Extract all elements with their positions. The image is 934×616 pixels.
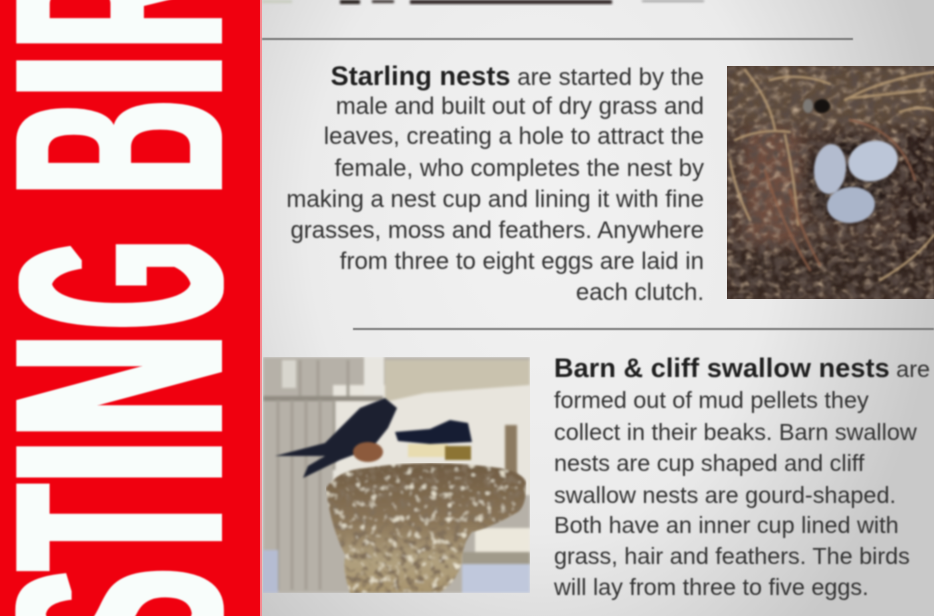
icon: three eggs [812, 135, 902, 225]
icon: swallows [275, 398, 472, 478]
photo: swallows on mud nest [263, 357, 530, 593]
text block: starling nests: female, who completes the nest by [334, 155, 704, 182]
text block: starling nests [286, 61, 705, 306]
text block: barn and cliff swallow nests: Barn & cliff swallow nests are [554, 353, 930, 383]
title: vertical lettering [0, 0, 286, 616]
text block: barn and cliff swallow nests: collect in their beaks. Barn swallow [554, 419, 917, 445]
panel: red title band [0, 0, 262, 616]
text block: starling nests: Starling nests are started by the [331, 61, 704, 91]
text block: barn and cliff swallow nests [553, 353, 930, 601]
text block: barn and cliff swallow nests: swallow nests are gourd-shaped. [554, 482, 896, 508]
text block: starling nests: leaves, creating a hole to attract the [324, 123, 704, 150]
text block: barn and cliff swallow nests: Both have an inner cup lined with [554, 512, 899, 538]
text block: starling nests: making a nest cup and lining it with fine [286, 186, 704, 213]
photo: starling nest with eggs [727, 66, 934, 299]
text block: starling nests: from three to eight eggs are laid in [340, 248, 704, 275]
text block: barn and cliff swallow nests: formed out of mud pellets they [554, 387, 869, 413]
divider: top rule [262, 38, 853, 40]
text block: starling nests: male and built out of dry grass and [336, 93, 704, 120]
icon: mud nest [326, 463, 526, 593]
text block: barn and cliff swallow nests: nests are cup shaped and cliff [554, 450, 864, 476]
text block: barn and cliff swallow nests: will lay from three to five eggs. [554, 574, 869, 600]
text block: barn and cliff swallow nests: grass, hair and feathers. The birds [554, 543, 910, 569]
divider: lower rule [353, 328, 934, 330]
text block: starling nests: each clutch. [576, 279, 704, 306]
photo strip: bottom edge of previous photo [262, 0, 705, 6]
text block: starling nests: grasses, moss and feathers. Anywhere [290, 217, 704, 244]
